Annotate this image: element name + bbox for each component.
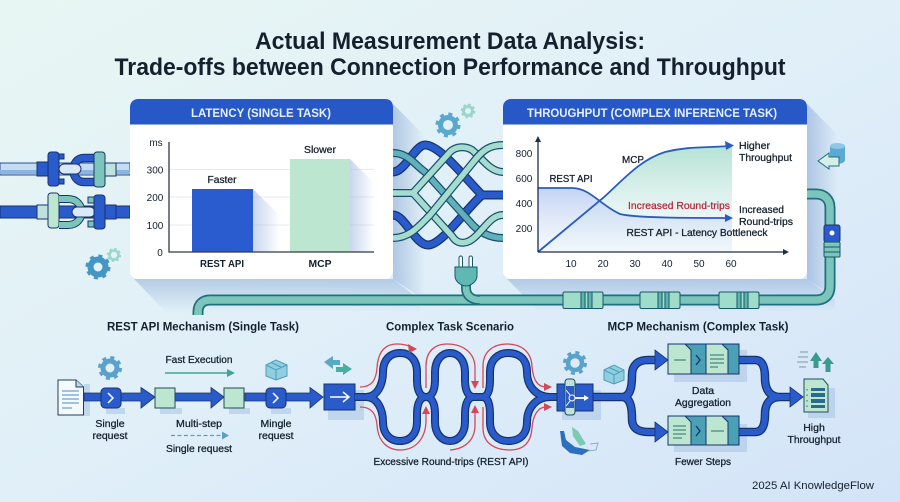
bar chart: latency: ms	[149, 138, 163, 149]
line chart: throughput	[516, 136, 793, 270]
panel: throughput: THROUGHPUT (COMPLEX INFERENCE TASK)	[527, 106, 777, 120]
box: fewer steps	[668, 416, 739, 445]
line chart: throughput: 10	[565, 259, 577, 270]
bar chart: latency: Slower	[304, 144, 336, 156]
soft shadows	[562, 350, 835, 452]
line chart: throughput: MCP	[622, 154, 644, 166]
heading: MCP mechanism: MCP Mechanism (Complex Task)	[608, 320, 789, 334]
labels: Aggregation	[675, 397, 731, 409]
lower pipe	[0, 193, 130, 229]
panel: latency: LATENCY (SINGLE TASK)	[191, 106, 331, 120]
line chart: throughput: Increased	[739, 204, 784, 216]
line chart: throughput: 30	[629, 259, 641, 270]
bar chart: latency: 0	[157, 248, 163, 259]
icon: gears left	[87, 249, 120, 278]
fast execution arrow	[165, 354, 235, 377]
bar chart: latency: Faster	[208, 174, 237, 186]
step labels: request	[92, 430, 128, 442]
step labels: request	[258, 430, 294, 442]
latency header	[130, 99, 393, 124]
long teal pipe	[198, 194, 830, 315]
arrowheads	[655, 350, 803, 442]
line chart: throughput: REST API	[550, 173, 592, 185]
line chart: throughput: 200	[516, 224, 533, 235]
line chart: throughput: Higher	[739, 140, 770, 152]
pipes: left couplers	[0, 152, 130, 229]
icon: database with arrow	[818, 143, 845, 169]
credit: 2025 AI KnowledgeFlow	[752, 480, 874, 492]
icon: gear	[100, 358, 120, 378]
labels: Fewer Steps	[675, 456, 731, 468]
line chart: throughput: 20	[597, 259, 609, 270]
bar chart: latency: 200	[147, 193, 164, 204]
pipe connectors	[563, 292, 759, 308]
icon: up arrows	[797, 352, 834, 372]
icon: swap arrows	[324, 356, 352, 375]
title	[114, 28, 786, 81]
step labels: Single request	[166, 443, 232, 455]
line chart: throughput: 60	[725, 259, 737, 270]
card shadows	[134, 104, 838, 312]
throughput header	[503, 99, 807, 124]
red round-trip arrows	[360, 344, 546, 450]
line chart: throughput: 400	[516, 199, 533, 210]
line chart: throughput: Throughput	[739, 152, 792, 164]
line chart: throughput: 600	[516, 174, 533, 185]
heading: REST API mechanism: REST API Mechanism (Single Task)	[107, 320, 299, 334]
bar chart: latency	[147, 138, 374, 270]
label: excessive round-trips: Excessive Round-trips (REST API)	[374, 456, 528, 468]
braided pipes between cards	[393, 145, 503, 245]
soft shadows	[62, 384, 364, 420]
router hub	[557, 379, 593, 415]
step labels: Mingle	[261, 418, 292, 430]
icon: document	[58, 380, 84, 415]
line chart: throughput: Round-trips	[739, 216, 793, 228]
blue pipe connector	[824, 225, 840, 257]
icon: plug	[455, 256, 477, 286]
line chart: throughput: REST API - Latency Bottleneck	[626, 227, 768, 239]
title: Actual Measurement Data Analysis:	[255, 28, 645, 55]
pipes forking	[590, 360, 792, 432]
upper pipe	[0, 152, 130, 187]
flow: round-trip loops	[355, 344, 560, 450]
fast execution arrow: Fast Execution	[166, 354, 233, 366]
step markers	[101, 384, 355, 410]
icon: output document	[804, 379, 828, 412]
line chart: throughput: 50	[693, 259, 705, 270]
panel: latency	[130, 99, 393, 279]
box: data aggregation	[668, 344, 739, 374]
icon: gears center	[437, 104, 474, 136]
bar chart: latency: MCP	[308, 258, 332, 270]
labels: Throughput	[788, 434, 841, 446]
labels: Data	[692, 385, 714, 397]
step labels	[92, 418, 294, 455]
title: Trade-offs between Connection Performance and Throughput	[114, 54, 786, 81]
panel: throughput	[503, 99, 807, 279]
labels: High	[803, 422, 825, 434]
icon: gear	[564, 352, 586, 374]
bar chart: latency: REST API	[200, 258, 244, 270]
icon: box	[266, 360, 287, 380]
step labels: Single	[95, 418, 125, 430]
flow: MCP mechanism	[557, 344, 841, 468]
step labels: Multi-step	[176, 418, 222, 430]
line chart: throughput: 40	[661, 259, 673, 270]
flow: REST API mechanism	[58, 354, 364, 455]
icon: scattered shapes	[560, 427, 598, 455]
heading: complex task scenario: Complex Task Scenario	[386, 320, 514, 334]
line chart: throughput: Increased Round-trips	[628, 200, 730, 212]
icon: box	[604, 365, 624, 384]
labels	[675, 385, 841, 468]
line chart: throughput: 800	[516, 149, 533, 160]
bar chart: latency: 300	[147, 166, 164, 176]
bar chart: latency: 100	[147, 221, 164, 232]
